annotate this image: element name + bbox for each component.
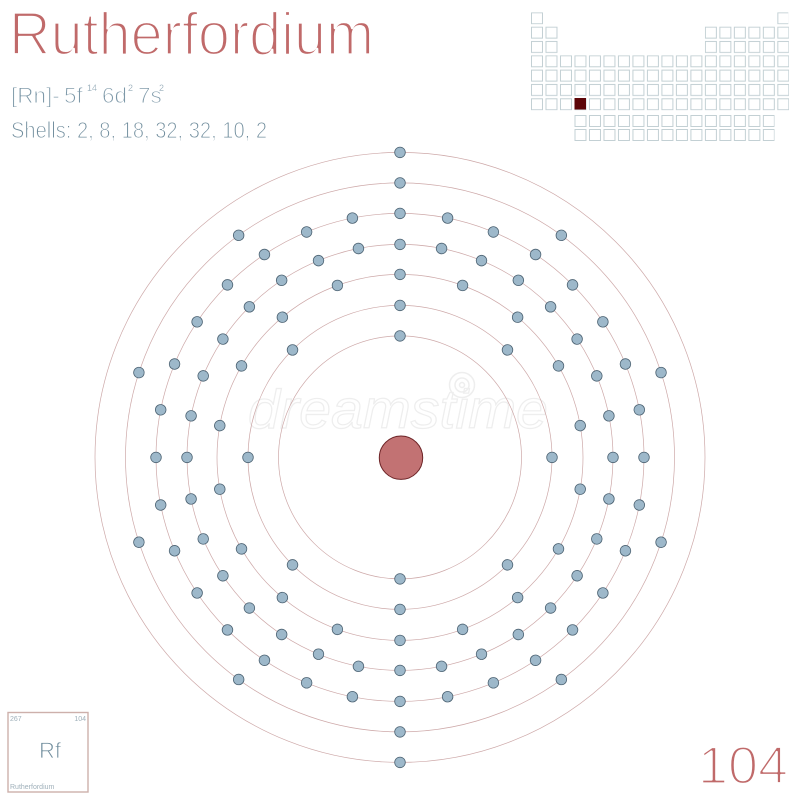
shell counts: Shells: 2, 8, 18, 32, 32, 10, 2 — [11, 117, 267, 143]
electron configuration: 14 — [87, 83, 97, 93]
electron configuration: [Rn]- — [11, 83, 60, 108]
highlighted element cell — [574, 98, 586, 110]
element symbol: Rf — [39, 738, 62, 763]
electrons — [132, 147, 668, 768]
shell 4: 32 electrons — [182, 239, 618, 676]
orbit rings — [95, 152, 705, 762]
atomic number small: 104 — [74, 716, 86, 723]
electron configuration: 2 — [159, 83, 164, 93]
atomic mass: 267 — [10, 716, 22, 723]
element tile — [8, 712, 88, 792]
shell 6: 10 electrons — [132, 178, 668, 737]
shell 1: 2 electrons — [395, 331, 405, 584]
shell 7: 2 electrons — [395, 147, 405, 768]
periodic table locator — [531, 12, 789, 141]
watermark: dreamstime — [248, 378, 548, 440]
element name small: Rutherfordium — [10, 784, 55, 791]
shell 5: 32 electrons — [151, 208, 649, 707]
electron configuration: 7s — [138, 83, 162, 108]
electron configuration: 2 — [128, 83, 133, 93]
watermark spiral — [450, 372, 474, 398]
shell 2: 8 electrons — [243, 300, 557, 615]
electron configuration: 5f — [64, 83, 84, 108]
title: Rutherfordium — [9, 0, 374, 68]
shell 3: 18 electrons — [214, 269, 586, 646]
electron configuration: 6d — [102, 83, 127, 108]
nucleus — [379, 436, 423, 479]
atomic number: 104 — [698, 736, 788, 796]
